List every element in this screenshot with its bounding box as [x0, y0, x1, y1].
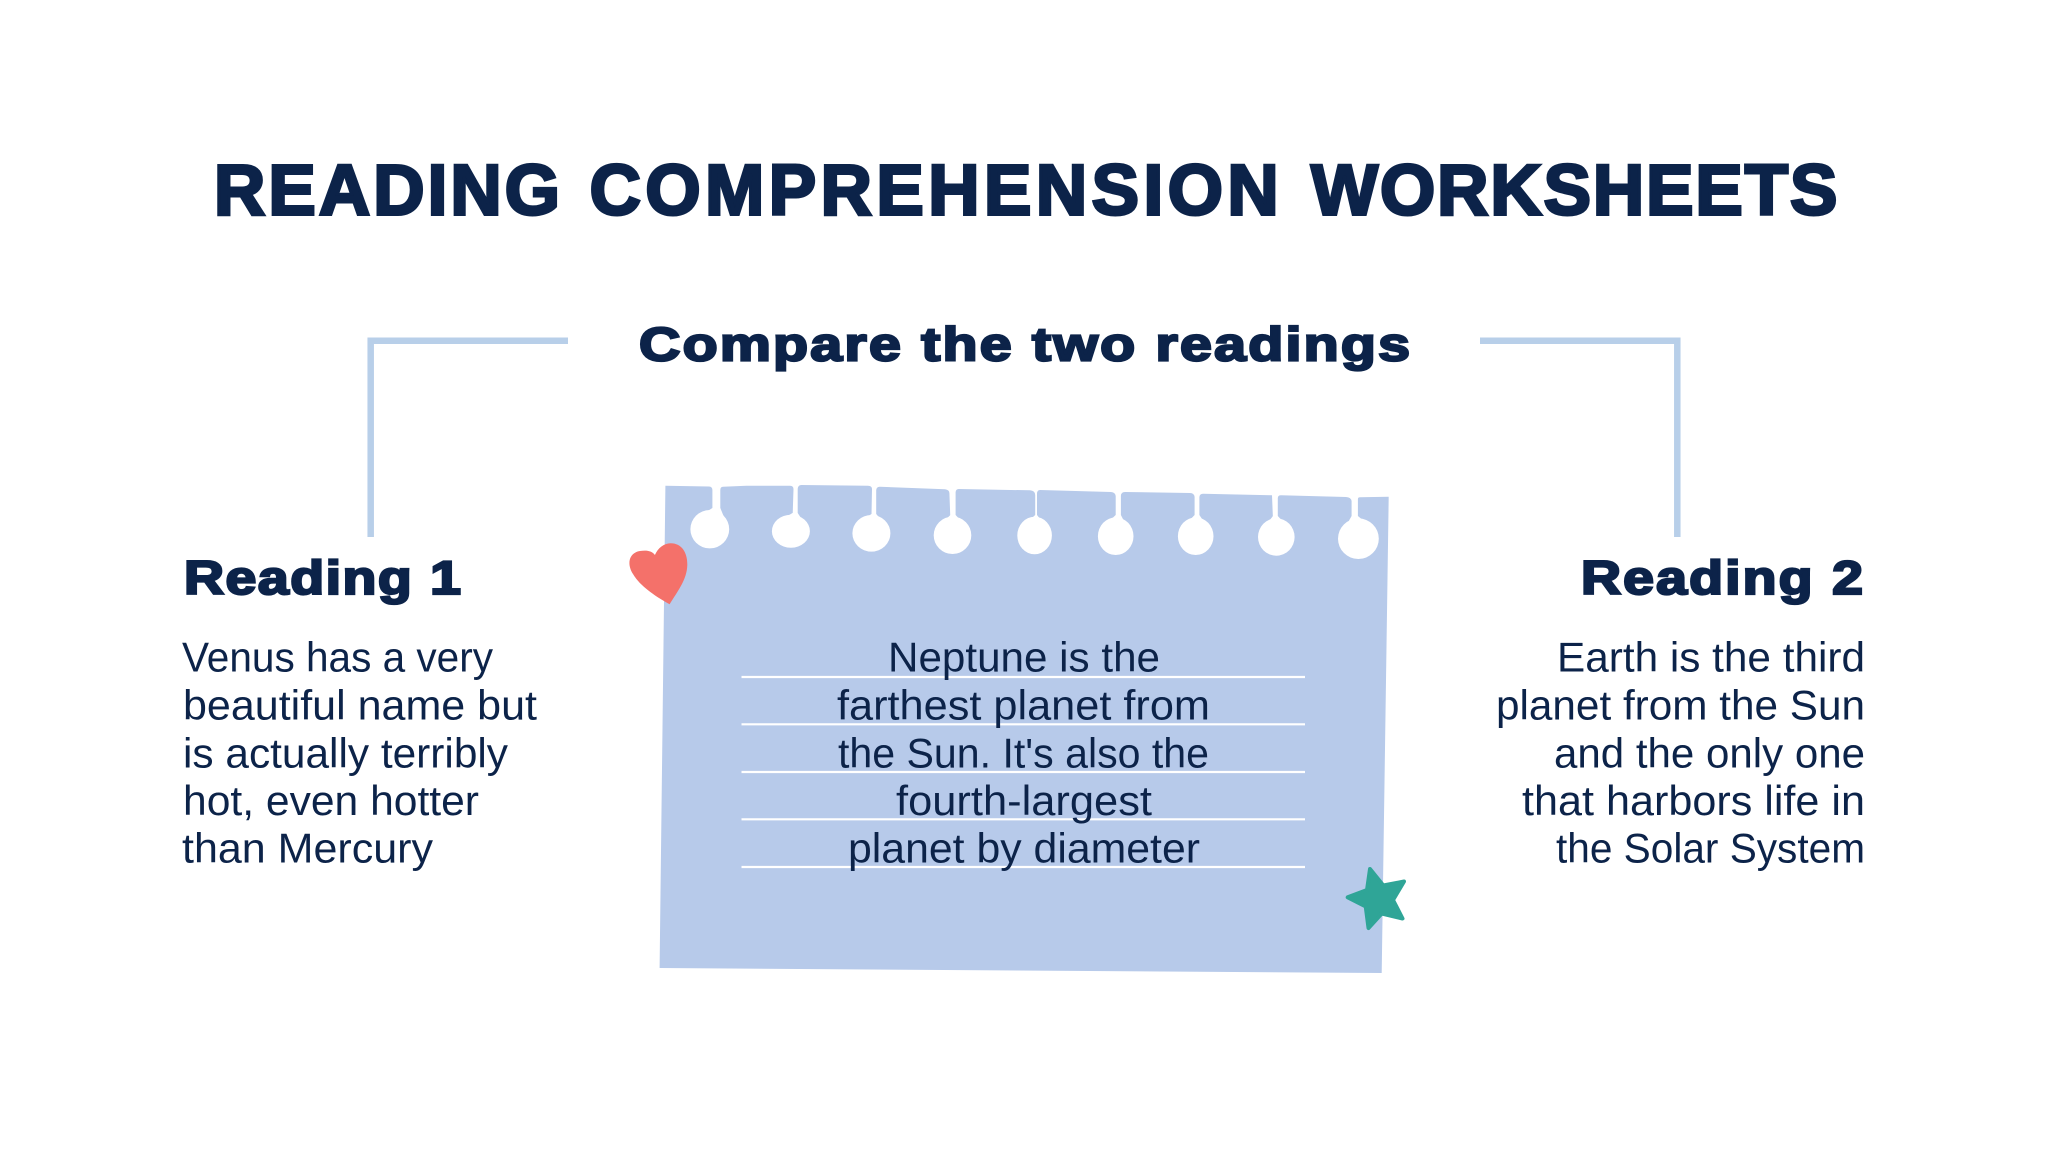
text block: paper body: Neptune is the	[888, 634, 1160, 681]
text block: reading 1 body	[182, 634, 537, 872]
punched holes	[690, 508, 1379, 559]
text block: reading 2 body: the Solar System	[1556, 825, 1865, 872]
text block: reading 1 body: is actually terribly	[183, 730, 508, 776]
left bracket connector	[371, 341, 568, 537]
title: COMPREHENSION	[590, 152, 1283, 230]
panel: notebook paper	[629, 485, 1404, 973]
right bracket connector	[1480, 341, 1677, 537]
heading: reading 2: Reading 2	[1581, 551, 1863, 604]
text block: reading 2 body: Earth is the third	[1557, 634, 1865, 681]
text block: reading 1 body: than Mercury	[182, 825, 433, 872]
text block: paper body: farthest planet from	[837, 682, 1210, 728]
heading: reading 1: Reading 1	[184, 551, 461, 604]
ruled lines	[742, 677, 1305, 867]
text block: reading 1 body: hot, even hotter	[183, 777, 479, 824]
text block: reading 1 body: Venus has a very	[182, 634, 493, 681]
icon: heart	[629, 543, 687, 604]
subtitle: Compare the two readings	[639, 319, 1410, 371]
text block: reading 2 body: that harbors life in	[1522, 777, 1865, 824]
text block: reading 2 body: planet from the Sun	[1496, 682, 1865, 728]
title: READING	[214, 152, 563, 230]
title: WORKSHEETS	[1311, 152, 1839, 230]
text block: paper body	[837, 634, 1210, 872]
text block: reading 2 body: and the only one	[1554, 730, 1865, 776]
text block: reading 2 body	[1496, 634, 1865, 872]
panel: reading 1	[182, 551, 537, 872]
paper sheet with torn tabs	[660, 485, 1389, 973]
text block: paper body: the Sun. It's also the	[838, 730, 1209, 776]
panel: reading 2	[1496, 551, 1865, 872]
text block: paper body: fourth-largest	[896, 777, 1152, 824]
icon: star	[1348, 869, 1404, 928]
text block: reading 1 body: beautiful name but	[183, 682, 537, 728]
text block: paper body: planet by diameter	[848, 825, 1200, 872]
